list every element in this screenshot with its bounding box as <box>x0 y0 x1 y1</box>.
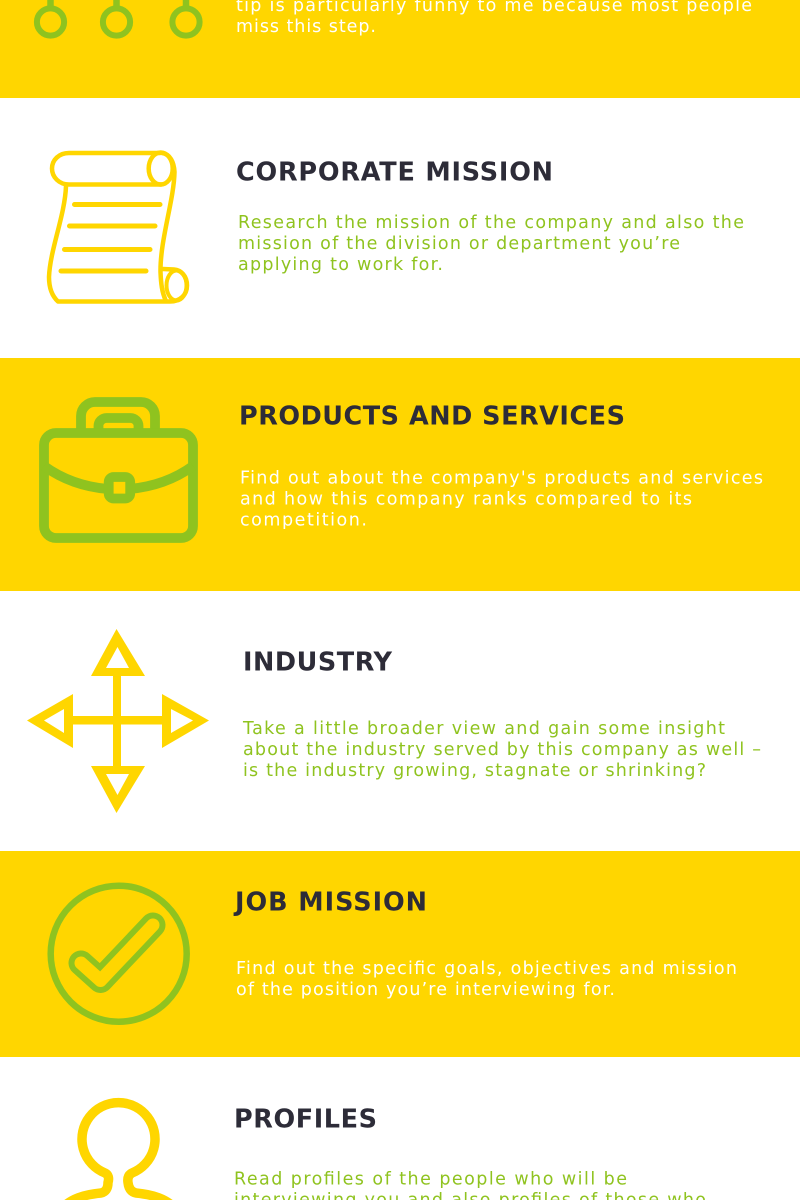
heading: job mission: JOB MISSION <box>233 888 427 918</box>
text: profiles body: Read profiles of the people who will be <box>234 1170 627 1190</box>
text: profiles body <box>234 1170 706 1200</box>
heading: corporate mission: CORPORATE MISSION <box>236 158 553 188</box>
icon: three rings <box>37 0 200 36</box>
text: products and services body: competition. <box>240 510 367 530</box>
panel: corporate mission <box>0 98 800 358</box>
text: industry body: Take a little broader view and gain some insight <box>242 719 725 739</box>
text: industry body: is the industry growing, stagnate or shrinking? <box>243 761 706 781</box>
text: corporate mission body: applying to work for. <box>238 255 443 275</box>
text: corporate mission body: mission of the division or department you’re <box>238 234 680 254</box>
icon: four-way arrows <box>27 629 209 813</box>
text: corporate mission body: Research the mission of the company and also the <box>238 213 744 233</box>
text: industry body: about the industry served by this company as well – <box>243 740 761 760</box>
text: job mission body: Find out the specific goals, objectives and mission <box>236 959 737 979</box>
panel: products and services <box>0 358 800 591</box>
text: products and services body: Find out about the company's products and services <box>240 468 763 488</box>
text: products and services body <box>240 468 763 530</box>
text: intro body: miss this step. <box>236 17 376 37</box>
panel: industry <box>0 591 800 851</box>
icon: person <box>60 1103 177 1200</box>
heading: industry: INDUSTRY <box>243 648 393 678</box>
text: job mission body: of the position you’re interviewing for. <box>236 980 615 1000</box>
panel: profiles <box>0 1057 800 1200</box>
text: job mission body <box>236 959 737 1000</box>
text: industry body <box>242 719 761 781</box>
heading: profiles: PROFILES <box>234 1104 377 1134</box>
heading: products and services: PRODUCTS AND SERVICES <box>239 402 625 432</box>
panel: job mission <box>0 851 800 1057</box>
text: intro body <box>236 0 752 37</box>
text: corporate mission body <box>238 213 744 275</box>
icon: check mark in circle <box>51 886 187 1022</box>
icon: briefcase <box>44 402 193 538</box>
icon: scroll <box>49 152 187 302</box>
text: products and services body: and how this company ranks compared to its <box>240 490 692 510</box>
panel: intro tip <box>0 0 800 98</box>
